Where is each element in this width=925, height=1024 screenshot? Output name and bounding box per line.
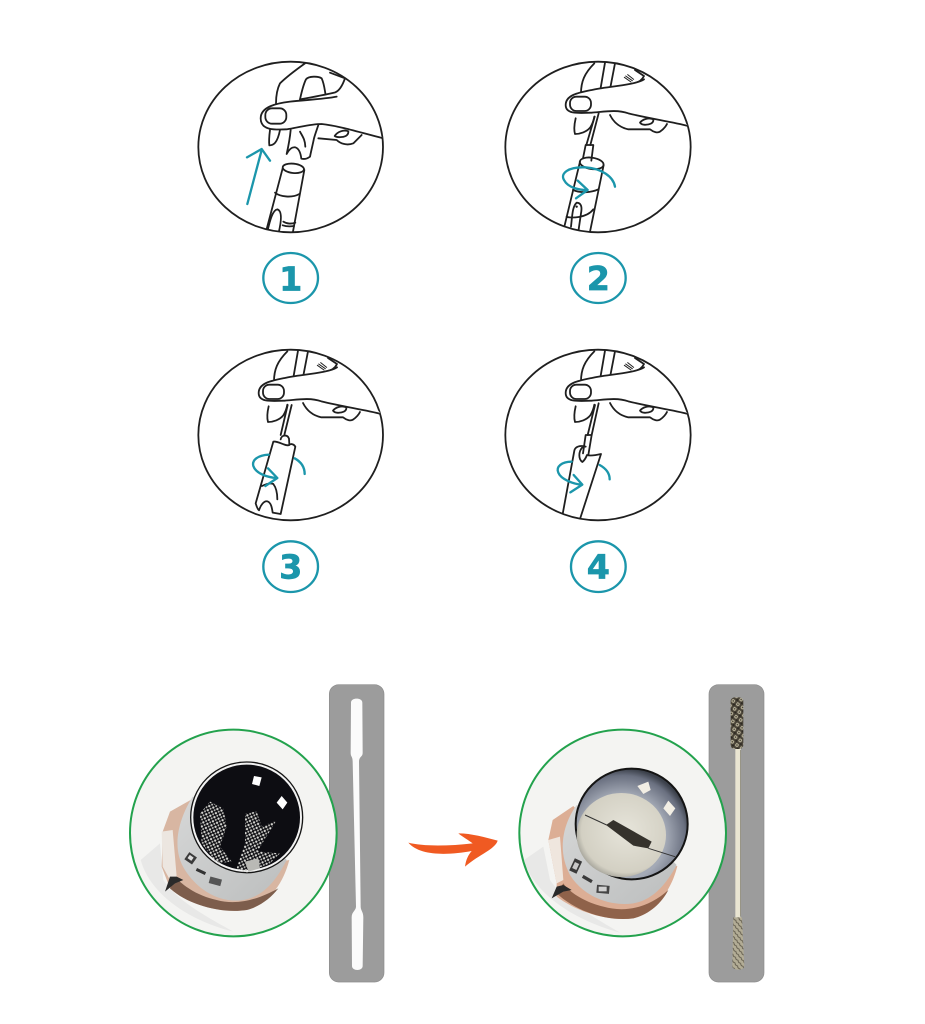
swab tray: dirty swab [709, 685, 764, 982]
arrow: upward [247, 149, 270, 204]
hand with swab and tool [564, 63, 688, 233]
panel: step 2 illustration [505, 62, 691, 233]
badge: step 2: 2 [587, 259, 610, 298]
badge: step 3 [263, 541, 318, 592]
badge: step 2 [571, 253, 626, 303]
hand with tool pulled off [256, 351, 381, 514]
panel: step 1 illustration [198, 62, 383, 233]
clean cotton swab [351, 699, 363, 970]
arrow: rotate [563, 167, 615, 198]
arrow: rotate [253, 455, 305, 486]
arrow: rotate [558, 462, 610, 492]
hand with tool reversed [563, 351, 688, 519]
hand with cap [261, 63, 383, 233]
arrow: before to after [408, 833, 498, 867]
panel: after cleaning [519, 685, 764, 982]
panel: before cleaning [130, 685, 384, 982]
panel: step 4 illustration [505, 350, 691, 520]
before photo: sooty burner [130, 730, 337, 936]
panel: step 3 illustration [198, 350, 383, 520]
badge: step 1: 1 [279, 260, 302, 299]
badge: step 3: 3 [279, 548, 302, 587]
badge: step 4 [571, 541, 626, 592]
after photo: clean burner [519, 730, 726, 936]
badge: step 4: 4 [587, 548, 610, 587]
badge: step 1 [263, 253, 318, 303]
swab tray: clean swab [329, 685, 384, 982]
dirty cotton swab [731, 697, 744, 970]
